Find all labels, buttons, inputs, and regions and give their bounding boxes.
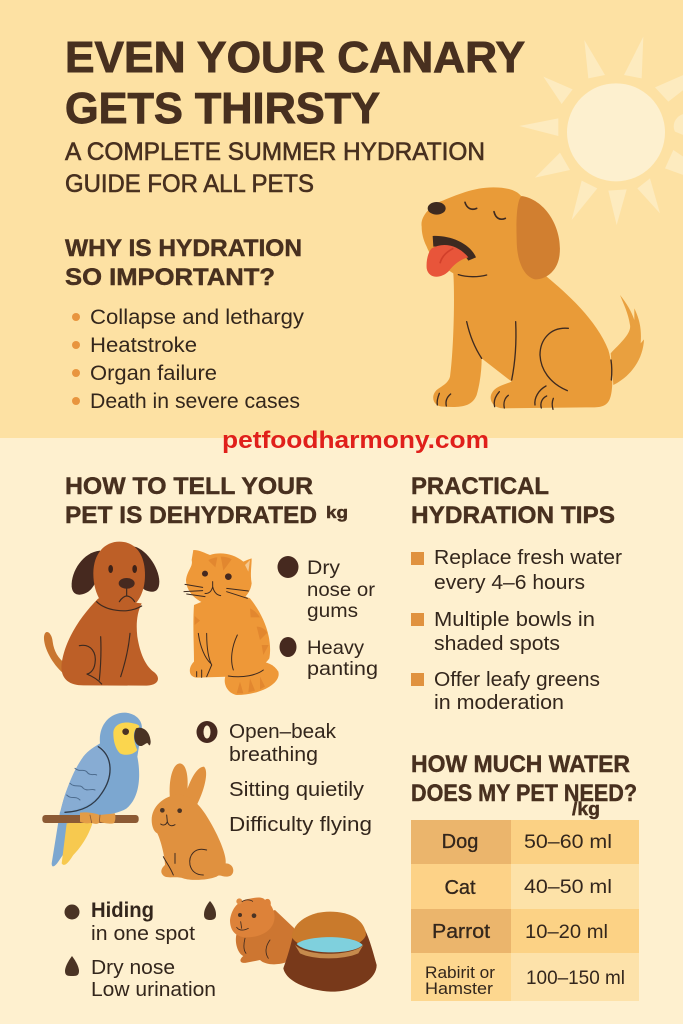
heading: why is hydration important: [65, 235, 302, 291]
icon: hamster: [230, 898, 297, 964]
list: dog and cat symptoms: nose or: [307, 579, 376, 601]
list: hamster symptoms: Dry nose: [91, 957, 175, 979]
list: hydration tips: shaded spots: [434, 633, 560, 655]
list: hamster symptoms: in one spot: [91, 923, 195, 945]
subtitle: GUIDE FOR ALL PETS: [65, 170, 314, 198]
list: hydration tips: every 4–6 hours: [434, 572, 585, 594]
table: water per kg: 50–60 ml: [524, 831, 612, 853]
heading: how to tell dehydration: HOW TO TELL YOUR: [65, 473, 313, 500]
title: EVEN YOUR CANARY: [65, 33, 525, 82]
table: water per kg: Dog: [442, 831, 478, 853]
list: dog and cat symptoms: panting: [307, 658, 378, 680]
heading: why is hydration important: WHY IS HYDRATION: [65, 235, 302, 262]
subtitle: [65, 138, 485, 198]
title: [65, 33, 525, 133]
icon: sad brown dog: [44, 542, 159, 686]
list: dehydration risks: Organ failure: [90, 362, 217, 385]
list: parrot and rabbit symptoms: breathing: [229, 744, 318, 766]
heading: how much water: DOES MY PET NEED?: [411, 780, 637, 807]
list: hamster symptoms: Low urination: [91, 979, 216, 1001]
list: dehydration risks: Death in severe cases: [90, 390, 300, 413]
icon: water bowl: [283, 912, 377, 992]
heading: how to tell dehydration: [65, 473, 348, 529]
table: water per kg: 10–20 ml: [525, 921, 608, 943]
heading: how to tell dehydration: PET IS DEHYDRATED: [65, 502, 317, 529]
heading: how much water: /kg: [572, 799, 600, 819]
list: parrot and rabbit symptoms: Sitting quietily: [229, 779, 364, 801]
heading: practical hydration tips: [411, 473, 615, 529]
table: water per kg: Rabirit or: [425, 964, 496, 982]
icon: panting golden dog: [421, 187, 644, 409]
icon: orange rabbit: [152, 763, 233, 880]
table: water per kg: 100–150 ml: [526, 967, 625, 989]
list: hydration tips: Offer leafy greens: [434, 669, 600, 691]
icon: orange cat: [184, 550, 279, 695]
list: dog and cat symptoms: Heavy: [307, 637, 364, 659]
list: parrot and rabbit symptoms: Open–beak: [229, 721, 337, 743]
heading: why is hydration important: SO IMPORTANT?: [65, 264, 275, 291]
list: hamster symptoms: Hiding: [91, 899, 154, 922]
list: parrot and rabbit symptoms: Difficulty flying: [229, 814, 372, 836]
icon: sun: [519, 37, 683, 225]
list: hamster symptoms: [64, 899, 216, 1001]
title: GETS THIRSTY: [65, 84, 380, 133]
panel: bottom section background: [0, 438, 683, 1024]
icon: blue parrot on perch: [42, 713, 151, 866]
heading: how much water: HOW MUCH WATER: [411, 751, 630, 778]
list: dehydration risks: Collapse and lethargy: [90, 306, 305, 329]
table: water per kg: Cat: [444, 877, 476, 899]
list: dog and cat symptoms: gums: [307, 600, 358, 622]
list: hydration tips: Multiple bowls in: [434, 609, 595, 631]
heading: how to tell dehydration: kg: [326, 503, 348, 522]
list: parrot and rabbit symptoms: [196, 721, 372, 836]
list: dog and cat symptoms: Dry: [307, 557, 340, 579]
table: water per kg: Parrot: [432, 921, 490, 943]
list: hydration tips: in moderation: [434, 692, 564, 714]
watermark: website: petfoodharmony.com: [222, 427, 489, 454]
panel: top section background: [0, 0, 683, 438]
table: water per kg: [411, 820, 639, 1001]
heading: practical hydration tips: PRACTICAL: [411, 473, 549, 500]
list: hydration tips: Replace fresh water: [434, 547, 622, 569]
list: dog and cat symptoms: [278, 556, 378, 680]
table: water per kg: 40–50 ml: [524, 876, 612, 898]
heading: how much water: [411, 751, 637, 819]
list: dehydration risks: Heatstroke: [90, 334, 197, 357]
list: hydration tips: [411, 547, 622, 714]
subtitle: A COMPLETE SUMMER HYDRATION: [65, 138, 485, 166]
heading: practical hydration tips: HYDRATION TIPS: [411, 502, 615, 529]
table: water per kg: Hamster: [425, 980, 494, 998]
list: dehydration risks: [72, 306, 305, 413]
